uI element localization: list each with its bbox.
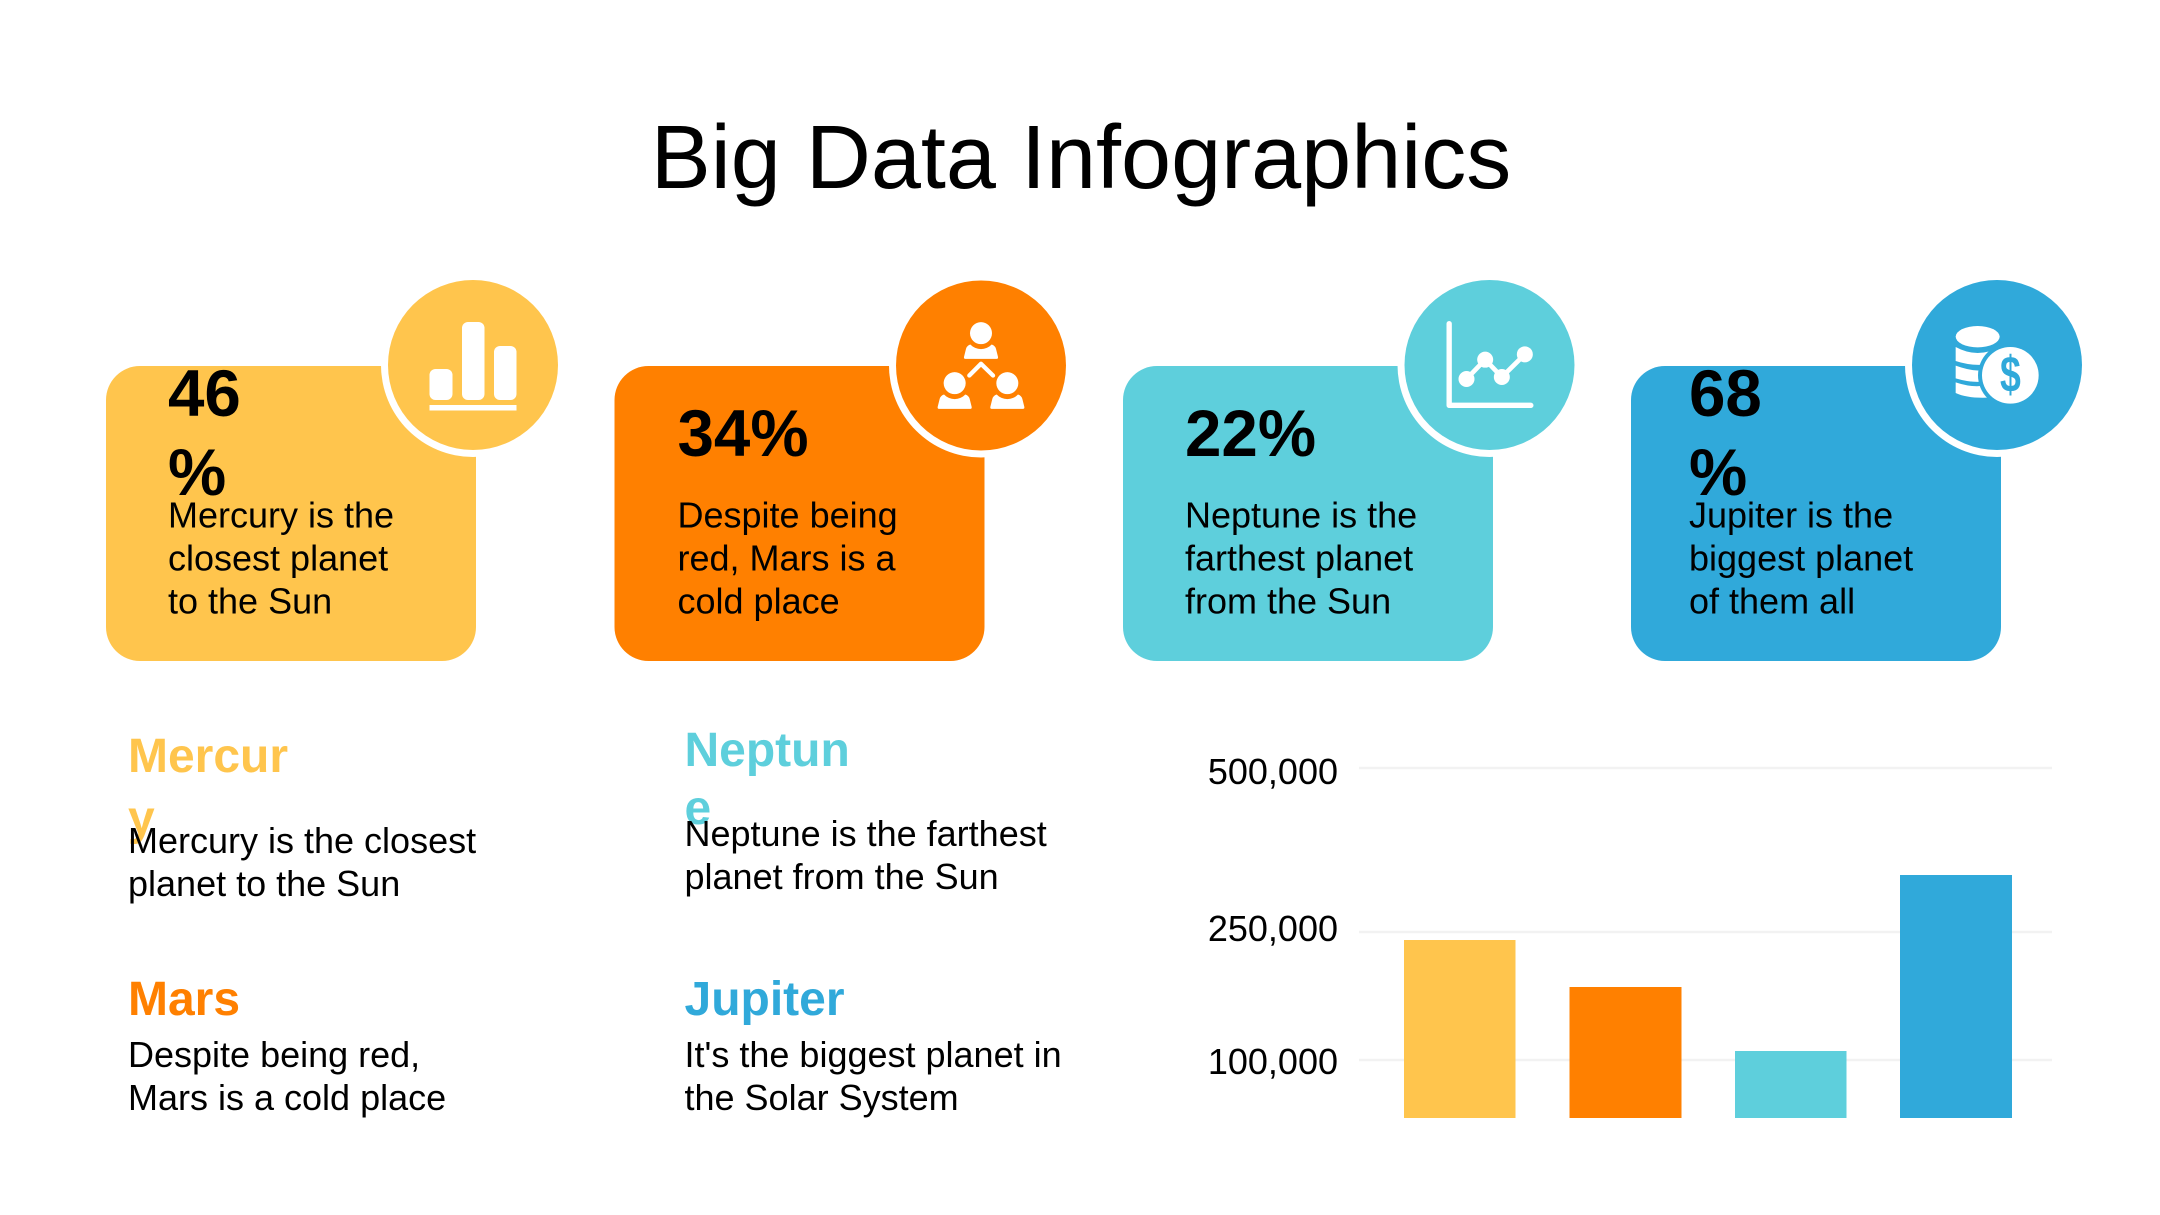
stat: 46%: 46 [168,357,241,430]
heading: Neptune: e [684,782,711,835]
icon: line chart [1398,273,1581,457]
text block: Mercury [128,730,476,904]
description: Mercury is the closest [128,820,476,861]
bar: Mercury [1404,940,1516,1118]
stat: 46%: % [168,436,226,509]
stat: 68%: 68 [1689,357,1762,430]
stat: 46% [168,357,241,509]
heading: Mercury: y [128,792,155,845]
description: of them all [1689,580,1855,622]
description: Mars is a cold place [128,1077,446,1118]
heading: Mercury: Mercur [128,730,288,783]
description: red, Mars is a [678,538,897,578]
heading: Mercury [128,730,288,845]
card background [106,366,476,661]
description [128,1034,446,1118]
heading: Mars: Mars [128,973,240,1026]
icon: coins: $ [2000,347,2021,403]
description: the Solar System [684,1077,959,1118]
description: farthest planet [1185,538,1413,578]
description [678,494,898,622]
title: Big Data Infographics [651,108,1511,208]
text block: Neptune [684,724,1047,897]
axis labels: 100,000 [1208,1041,1338,1082]
icon: coins [1905,273,2089,457]
description: It's the biggest planet in [684,1034,1062,1075]
description: planet to the Sun [128,863,400,904]
description: closest planet [168,538,388,578]
description [684,813,1047,897]
description: to the Sun [168,580,332,622]
description: Neptune is the [1185,494,1417,536]
description: cold place [678,580,840,622]
description [1185,494,1417,622]
bar chart [1208,751,2052,1118]
description: from the Sun [1185,580,1391,622]
heading: Neptune [684,724,850,835]
stat: 22%: 22% [1185,397,1316,470]
card background [614,366,984,661]
description: Jupiter is the [1689,494,1893,536]
description [128,820,476,904]
heading: Neptune: Neptun [684,724,850,777]
card background [1631,366,2001,661]
bar: Jupiter [1900,875,2012,1118]
axis labels: 250,000 [1208,908,1338,949]
panel: Mars card [614,274,1073,661]
text block: Mars [128,973,446,1118]
axis labels: 500,000 [1208,751,1338,792]
stat: 68%: % [1689,436,1747,509]
description: Despite being red, [128,1034,420,1075]
heading: Jupiter: Jupiter [684,973,845,1026]
bar: Mars [1570,987,1682,1118]
icon: people network [889,274,1073,457]
panel: Neptune card [1123,273,1581,661]
description: Despite being [678,494,898,536]
description: biggest planet [1689,538,1913,578]
description: Mercury is the [168,494,394,536]
description [168,494,394,622]
stat: 34%: 34% [678,397,809,470]
description [684,1034,1062,1118]
panel: Mercury card [106,273,565,661]
icon: bar chart [381,273,565,457]
description: Neptune is the farthest [684,813,1047,854]
axis labels [1208,751,1338,1082]
bar: Neptune [1735,1051,1846,1118]
description: planet from the Sun [684,856,999,897]
description [1689,494,1913,622]
panel: Jupiter card [1631,273,2089,661]
stat: 68% [1689,357,1762,509]
card background [1123,366,1493,661]
text block: Jupiter [684,973,1062,1118]
